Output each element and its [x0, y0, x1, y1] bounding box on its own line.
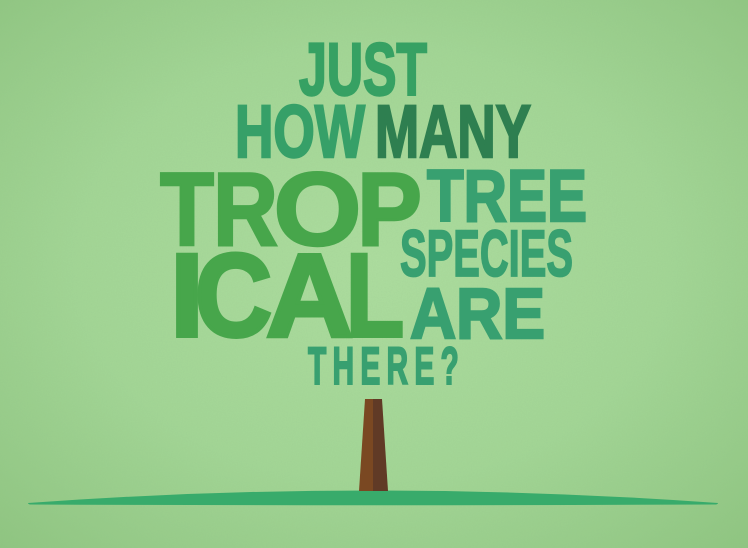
word: ICAL: I [170, 230, 204, 362]
tree canopy: headline text [160, 28, 587, 396]
word: MANY: MANY [375, 90, 531, 173]
word: SPECIES: SPECIES [400, 216, 573, 290]
word: TROP: R [213, 152, 278, 268]
word: THERE?: THERE? [308, 337, 465, 396]
word: ICAL: A [266, 230, 353, 362]
word: TROP: T [160, 152, 214, 268]
word: JUST: JUST [299, 28, 427, 111]
tree trunk [359, 399, 388, 491]
word: ICAL: L [346, 230, 404, 362]
ground [28, 490, 718, 505]
word: ICAL: C [195, 230, 272, 362]
word: TREE: TREE [427, 156, 587, 237]
word: TROP: O [274, 152, 362, 268]
word: ARE: ARE [410, 275, 545, 354]
word: TROP: P [357, 152, 422, 268]
word: HOW: HOW [235, 90, 365, 173]
